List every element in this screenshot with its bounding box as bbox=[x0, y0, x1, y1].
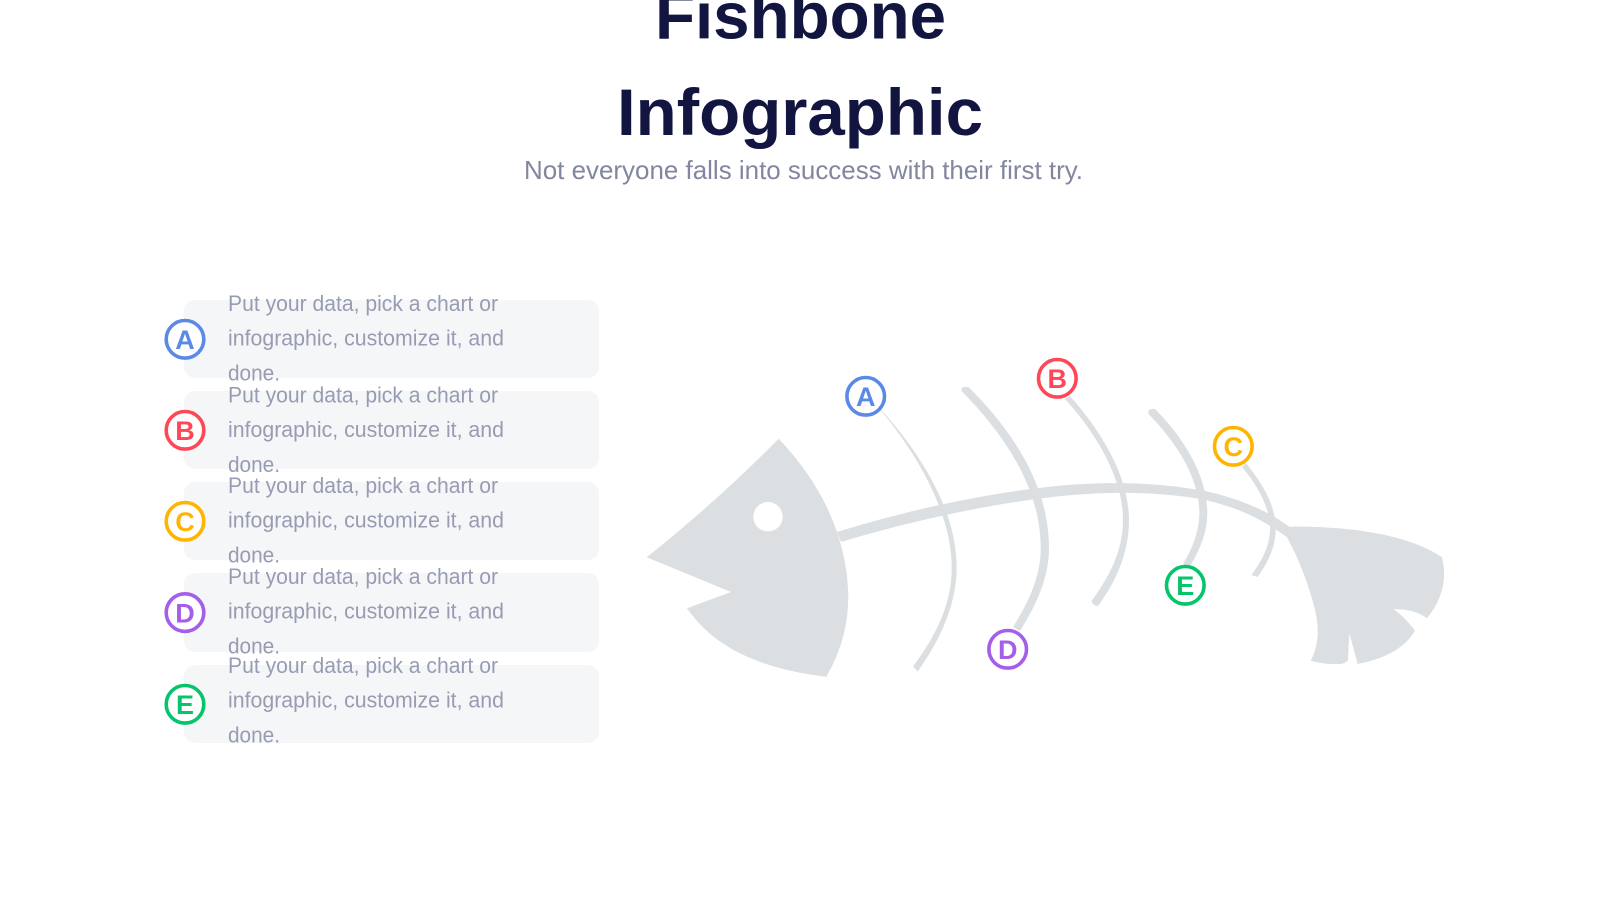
panel: item C: infographic, customize it, and bbox=[228, 508, 504, 533]
panel: item A: Put your data, pick a chart or bbox=[228, 291, 498, 316]
panel: item E: Put your data, pick a chart or bbox=[228, 653, 498, 678]
panel: item C bbox=[166, 473, 599, 568]
marker C: C bbox=[1224, 432, 1243, 462]
marker A bbox=[847, 378, 884, 415]
panel: item C: done. bbox=[228, 542, 280, 568]
panel: item B: infographic, customize it, and bbox=[228, 417, 504, 442]
rib E bbox=[1148, 409, 1207, 568]
chart: fish skeleton bbox=[647, 387, 1444, 677]
panel: item E bbox=[166, 653, 599, 748]
panel: item D: D bbox=[175, 598, 195, 628]
fish eye bbox=[753, 502, 783, 531]
fish head bbox=[647, 439, 848, 677]
panel: item A: A bbox=[175, 325, 195, 355]
panel: item D: Put your data, pick a chart or bbox=[228, 564, 498, 589]
panel: item B: B bbox=[175, 416, 195, 446]
panel: item D: done. bbox=[228, 634, 280, 658]
fish tail bbox=[1287, 527, 1444, 664]
rib C bbox=[1242, 463, 1276, 577]
panel: item E: infographic, customize it, and bbox=[228, 688, 504, 713]
marker A: A bbox=[856, 382, 875, 412]
title bbox=[617, 0, 983, 149]
panel: item B bbox=[166, 382, 599, 477]
marker E: E bbox=[1176, 571, 1194, 601]
subtitle: Not everyone falls into success with their first try. bbox=[524, 155, 1083, 185]
rib D bbox=[961, 387, 1049, 631]
panel: item B: Put your data, pick a chart or bbox=[228, 382, 498, 408]
panel: item E: E bbox=[176, 690, 194, 720]
spine bbox=[837, 483, 1290, 542]
title: Infographic bbox=[617, 75, 983, 149]
marker C bbox=[1214, 428, 1252, 465]
panel: item C: Put your data, pick a chart or bbox=[228, 473, 498, 498]
marker B: B bbox=[1048, 364, 1067, 394]
panel: item C: C bbox=[175, 507, 195, 537]
rib B bbox=[1065, 396, 1129, 606]
marker D bbox=[989, 630, 1026, 668]
panel: item A bbox=[166, 291, 599, 386]
marker B bbox=[1038, 360, 1076, 397]
panel: item D: infographic, customize it, and bbox=[228, 599, 504, 624]
panel: item B: done. bbox=[228, 452, 280, 477]
panel: item E: done. bbox=[228, 722, 280, 748]
rib A bbox=[881, 410, 957, 672]
panel: item A: infographic, customize it, and bbox=[228, 326, 504, 351]
marker D: D bbox=[998, 635, 1017, 665]
panel: item D bbox=[166, 564, 599, 658]
panel: item A: done. bbox=[228, 360, 280, 386]
marker E bbox=[1166, 566, 1204, 604]
